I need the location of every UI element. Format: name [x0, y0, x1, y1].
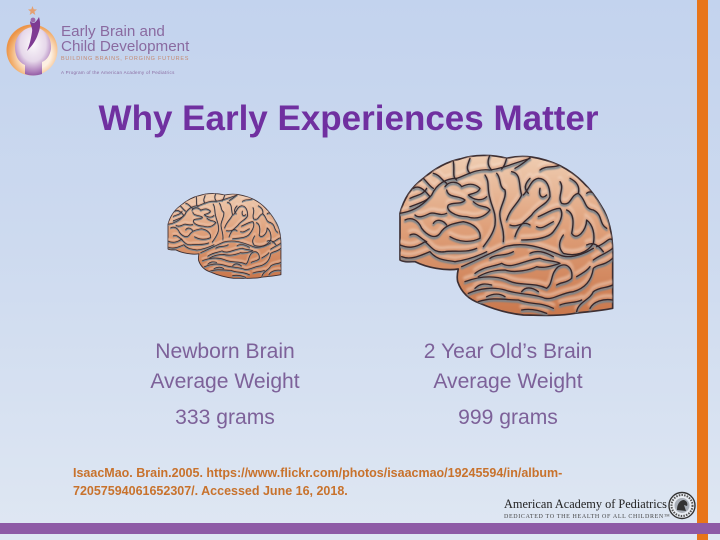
- logo icon: head with figure and star: [6, 6, 58, 76]
- orange vertical bar: [697, 0, 708, 540]
- caption: newborn brain: Newborn Brain: [155, 340, 295, 363]
- AAP seal: [668, 492, 696, 520]
- logo tagline: BUILDING BRAINS, FORGING FUTURES: [61, 56, 189, 62]
- logo wordmark: Early Brain and: [61, 23, 165, 40]
- logo wordmark: Child Development: [61, 38, 189, 55]
- caption: two year old brain: 999 grams: [458, 406, 558, 429]
- AAP tagline: DEDICATED TO THE HEALTH OF ALL CHILDREN™: [504, 514, 670, 520]
- citation text: [73, 466, 562, 498]
- caption: two year old brain: Average Weight: [433, 370, 583, 393]
- caption: two year old brain: [424, 340, 592, 429]
- logo: American Academy of Pediatrics: [504, 492, 696, 520]
- caption: two year old brain: 2 Year Old’s Brain: [424, 340, 592, 363]
- caption: newborn brain: Average Weight: [150, 370, 300, 393]
- logo: Early Brain and Child Development: [6, 6, 190, 76]
- icon: two year old brain illustration: [399, 154, 614, 316]
- title: Why Early Experiences Matter: [99, 99, 598, 138]
- logo subline: A Program of the American Academy of Pediatrics: [61, 70, 175, 75]
- caption: newborn brain: 333 grams: [175, 406, 275, 429]
- citation text: 72057594061652307/. Accessed June 16, 2018.: [73, 484, 348, 498]
- citation text: IsaacMao. Brain.2005. https://www.flickr.com/photos/isaacmao/19245594/in/album-: [73, 466, 562, 480]
- logo wordmark: [61, 23, 190, 55]
- caption: newborn brain: [150, 340, 300, 429]
- purple horizontal bar: [0, 523, 720, 534]
- icon: newborn brain illustration: [168, 193, 282, 279]
- AAP wordmark: American Academy of Pediatrics: [504, 497, 667, 511]
